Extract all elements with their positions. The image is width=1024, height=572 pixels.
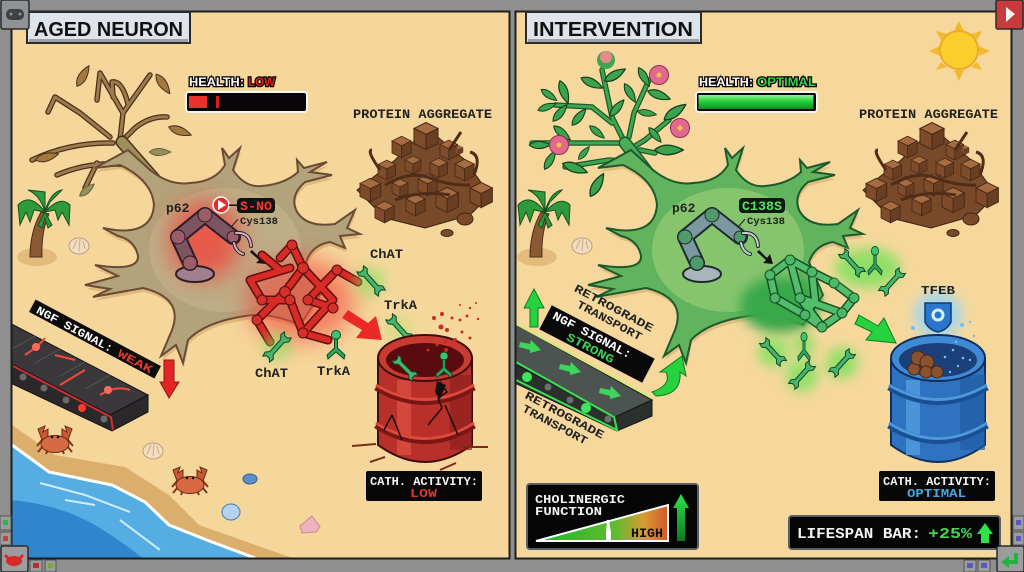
beach and sea bbox=[12, 425, 298, 560]
pile: protein aggregate right bbox=[863, 122, 998, 236]
cath activity low bbox=[366, 471, 482, 501]
label: p62: p62 bbox=[672, 201, 696, 216]
gauge panel: cholinergic function: CHOLINERGIC bbox=[535, 494, 625, 507]
broken red robot arms bbox=[250, 240, 358, 342]
label: NGF signal weak: NGF SIGNAL: bbox=[34, 305, 115, 356]
cath activity optimal: OPTIMAL bbox=[907, 488, 966, 501]
neuron: flowering dendrite tree bbox=[529, 51, 690, 199]
cath activity low: LOW bbox=[410, 488, 437, 501]
panel: aged neuron bbox=[0, 11, 510, 560]
small side buttons bbox=[0, 516, 1024, 572]
window button: return arrow bbox=[997, 546, 1024, 572]
icon: shell bbox=[572, 238, 592, 254]
labels: ChAT and TrkA: ChAT bbox=[255, 367, 289, 381]
label: Cys138: Cys138 bbox=[240, 216, 278, 228]
conveyor: strong signal bbox=[504, 318, 652, 431]
lifespan bar: LIFESPAN BAR: bbox=[797, 526, 921, 543]
barrel: blue lysosome bbox=[889, 335, 987, 462]
icon: sun bbox=[929, 21, 990, 81]
panel border: right bbox=[516, 12, 1012, 558]
red glow bbox=[169, 200, 355, 342]
label: NGF signal strong: STRONG bbox=[564, 331, 616, 367]
gauge panel: cholinergic function bbox=[527, 484, 698, 549]
health bar: low bbox=[186, 75, 307, 112]
label: Cys138 bbox=[232, 218, 278, 226]
label: protein aggregate right: PROTEIN AGGREGATE bbox=[859, 108, 998, 122]
label: NGF signal weak bbox=[28, 299, 161, 380]
label: NGF signal strong bbox=[539, 305, 655, 384]
health bar: low: HEALTH: bbox=[189, 75, 244, 89]
arrow: green to barrel bbox=[855, 315, 896, 343]
title: intervention: INTERVENTION bbox=[533, 19, 693, 41]
label: retrograde transport lower bbox=[516, 390, 606, 454]
arrow: green up bbox=[524, 289, 544, 327]
health bar: optimal: HEALTH: bbox=[699, 75, 753, 89]
icon: palm tree bbox=[17, 190, 70, 266]
folded green robot arms bbox=[765, 255, 859, 332]
arrow: curved green bbox=[652, 356, 686, 396]
health bar: optimal: OPTIMAL bbox=[757, 75, 816, 89]
pile: protein aggregate left bbox=[357, 122, 492, 236]
health bar: low: LOW bbox=[248, 75, 276, 89]
gauge panel: cholinergic function: HIGH bbox=[631, 527, 663, 541]
badge: C138S: C138S bbox=[742, 200, 783, 214]
label: protein aggregate left: PROTEIN AGGREGATE bbox=[353, 108, 492, 122]
label: retrograde transport lower: RETROGRADE bbox=[522, 390, 606, 442]
labels: ChAT and TrkA bbox=[255, 248, 418, 381]
title: intervention bbox=[526, 12, 701, 43]
label: retrograde transport upper: RETROGRADE bbox=[571, 283, 655, 336]
droplets bbox=[911, 321, 975, 373]
barrel: cracked red lysosome bbox=[352, 335, 488, 470]
lifespan bar bbox=[789, 516, 1000, 549]
gauge panel: cholinergic function: FUNCTION bbox=[535, 506, 602, 519]
splatter bbox=[426, 302, 479, 352]
label: retrograde transport lower: TRANSPORT bbox=[520, 403, 589, 448]
label: Cys138 bbox=[738, 218, 784, 226]
robot arm: p62 with S-NO bbox=[171, 208, 251, 282]
lifespan bar: +25% bbox=[928, 526, 973, 543]
panel border: left bbox=[12, 12, 510, 558]
icon: palm tree bbox=[517, 190, 570, 266]
arrow: red to barrel bbox=[342, 310, 382, 340]
labels: ChAT and TrkA: TrkA bbox=[317, 365, 351, 379]
panel: intervention bbox=[504, 11, 1012, 559]
label: Cys138: Cys138 bbox=[747, 216, 785, 228]
conveyor: weak signal bbox=[12, 324, 149, 432]
robot arm: healthy bbox=[678, 208, 758, 282]
icons: wrench and receptor in barrel bbox=[391, 352, 452, 382]
arrow: black bbox=[250, 250, 266, 264]
health bar: optimal bbox=[696, 75, 817, 112]
window button: game controller bbox=[1, 0, 29, 29]
badge: S-NO: S-NO bbox=[240, 200, 273, 214]
title: aged neuron: AGED NEURON bbox=[34, 19, 183, 41]
label: NGF signal strong: NGF SIGNAL: bbox=[550, 309, 634, 362]
title: aged neuron bbox=[27, 12, 190, 43]
label: retrograde transport upper: TRANSPORT bbox=[574, 299, 644, 344]
icons: shells bbox=[69, 238, 320, 533]
cath activity optimal: CATH. ACTIVITY: bbox=[883, 476, 991, 489]
cath activity low: CATH. ACTIVITY: bbox=[370, 476, 478, 489]
badge: TFEB shield bbox=[914, 284, 962, 339]
label: retrograde transport upper bbox=[565, 283, 655, 347]
neuron: sand shadow bbox=[589, 152, 864, 367]
icons: released wrenches and receptors bbox=[758, 246, 906, 392]
icons: crabs bbox=[37, 426, 208, 495]
badge: TFEB shield: TFEB bbox=[921, 284, 955, 298]
labels: ChAT and TrkA: TrkA bbox=[384, 299, 418, 313]
neuron: healthy cell body bbox=[588, 148, 863, 363]
arrow: black bbox=[757, 250, 773, 264]
window button: red play bbox=[996, 0, 1023, 29]
neuron: wilted dendrite tree bbox=[32, 64, 193, 199]
label: p62: p62 bbox=[166, 201, 190, 216]
window button: crab bbox=[1, 546, 28, 572]
icon: wrench and receptor with green glow bbox=[262, 265, 415, 363]
cath activity optimal bbox=[879, 471, 995, 501]
arrow: red down bbox=[160, 360, 179, 398]
labels: ChAT and TrkA: ChAT bbox=[370, 248, 404, 262]
label: NGF signal weak: WEAK bbox=[115, 348, 155, 377]
neuron: aged cell body bbox=[85, 148, 360, 363]
neuron: sand shadow bbox=[86, 152, 361, 367]
badge: S-NO bbox=[213, 197, 275, 214]
